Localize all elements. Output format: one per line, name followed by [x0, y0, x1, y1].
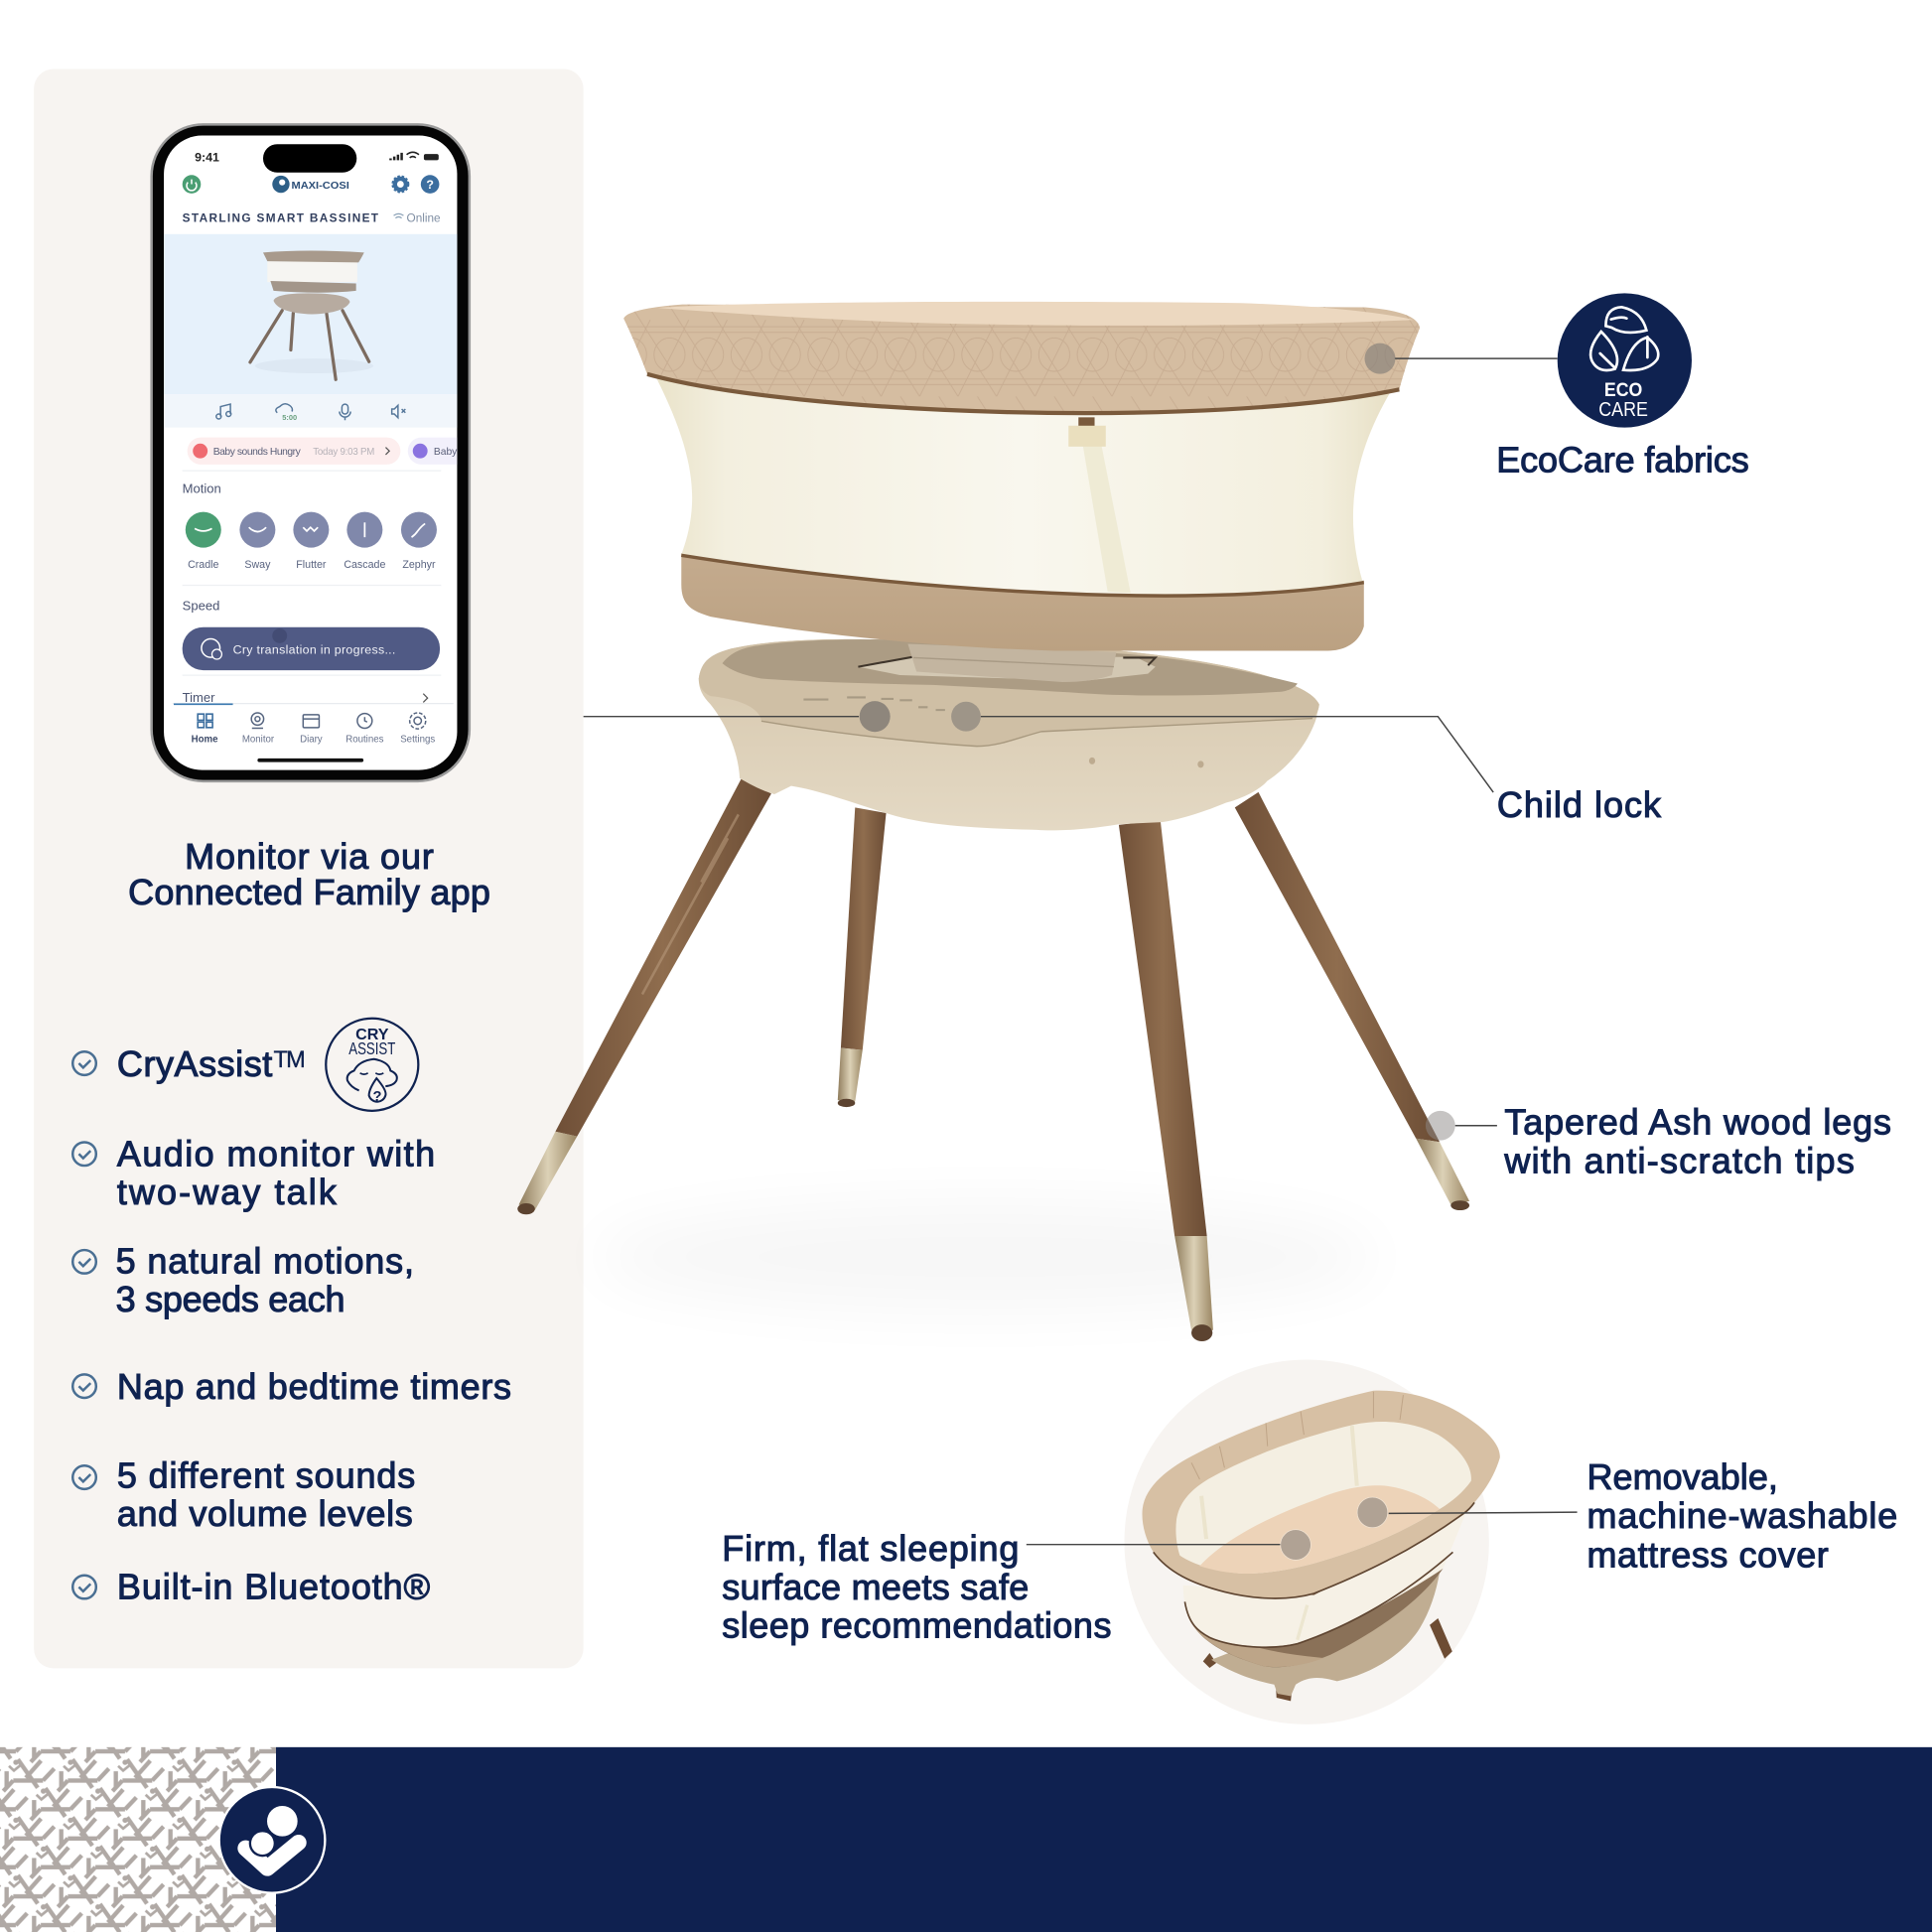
leader: sleeping surface — [1027, 1544, 1280, 1546]
timer row — [183, 693, 429, 703]
inset legs — [1203, 1618, 1452, 1701]
status bar: 9:41 — [195, 151, 219, 165]
status bar — [195, 144, 439, 173]
inset mattress — [1199, 1485, 1440, 1574]
feature: motions: 5 natural motions, — [116, 1241, 414, 1282]
footer banner — [0, 1747, 1932, 1932]
motion controls: Motion — [183, 481, 221, 495]
tab bar: Monitor — [242, 735, 275, 746]
icon: cry assist badge: ASSIST — [348, 1038, 396, 1058]
callout: sleeping surface: sleep recommendations — [722, 1604, 1111, 1645]
tab bar: Routines — [345, 735, 384, 746]
top rim — [621, 299, 1428, 421]
tab bar: Home — [192, 735, 218, 746]
callout: mattress cover: mattress cover — [1587, 1535, 1829, 1576]
product hero area — [164, 234, 457, 428]
callout: legs: with anti-scratch tips — [1503, 1140, 1855, 1180]
app header: STARLING SMART BASSINET — [183, 211, 379, 224]
feature: CryAssist — [72, 1043, 306, 1084]
base body — [699, 639, 1319, 830]
feature: CryAssist: TM — [274, 1046, 306, 1072]
feature: motions — [72, 1241, 414, 1319]
alert pills: Baby — [434, 447, 458, 458]
motion controls: Cascade — [344, 559, 385, 571]
motion controls: Flutter — [296, 559, 327, 571]
back legs — [838, 792, 1469, 1210]
floor shadow — [592, 1201, 1380, 1312]
speed label: Speed — [183, 598, 219, 613]
phone mockup — [150, 123, 471, 782]
feature: motions: 3 speeds each — [116, 1279, 345, 1319]
icon: eco care badge: ECO — [1604, 379, 1642, 401]
leader: mattress cover — [1389, 1512, 1578, 1513]
icon: cry assist badge — [326, 1019, 418, 1111]
inset: bassinet top view — [1124, 1360, 1500, 1725]
icon: eco care badge: CARE — [1598, 398, 1648, 421]
timer row: Timer — [183, 690, 215, 705]
alert pills: Today 9:03 PM — [313, 447, 374, 458]
motion controls: Sway — [244, 559, 271, 571]
icon: eco care badge — [1558, 293, 1692, 428]
inset interior — [1175, 1422, 1471, 1574]
icon: cry assist badge: CRY — [355, 1026, 389, 1043]
feature: timers: Nap and bedtime timers — [117, 1366, 511, 1407]
heading: connected family app: Monitor via our — [185, 836, 434, 877]
callout: mattress cover: Removable, — [1587, 1456, 1778, 1497]
motion controls: Zephyr — [402, 559, 436, 571]
marker: legs — [1426, 1111, 1497, 1141]
feature: sounds: 5 different sounds — [117, 1455, 415, 1496]
callout: sleeping surface: Firm, flat sleeping — [722, 1528, 1019, 1569]
feature: audio monitor — [72, 1134, 435, 1212]
front legs — [517, 778, 1213, 1341]
tab bar — [173, 704, 454, 762]
tab bar: Settings — [400, 735, 435, 746]
callout: sleeping surface — [722, 1528, 1111, 1645]
mesh wall — [651, 368, 1396, 595]
callout: mattress cover: machine-washable — [1587, 1495, 1897, 1536]
inset markers — [1281, 1530, 1311, 1560]
app header: MAXI-COSI — [292, 181, 349, 192]
panel: app and features — [34, 69, 584, 1668]
main bassinet — [517, 299, 1469, 1341]
feature: CryAssist: CryAssist — [117, 1043, 272, 1084]
feature: bluetooth: Built-in Bluetooth® — [117, 1566, 430, 1606]
callout: ecocare fabrics: EcoCare fabrics — [1496, 439, 1749, 480]
toast: cry translation — [183, 627, 440, 670]
timer label: 5:00 — [282, 413, 297, 422]
lower fabric band — [681, 553, 1364, 650]
heading: connected family app: Connected Family app — [128, 872, 490, 912]
callout: child lock: Child lock — [1497, 784, 1662, 825]
icon: cry assist badge: ? — [372, 1089, 381, 1105]
icon: brand logo — [219, 1787, 325, 1893]
alert pills: Baby sounds Hungry — [213, 447, 302, 458]
mesh strap and tag — [1068, 417, 1131, 593]
app header — [183, 175, 441, 224]
callout: legs — [1503, 1101, 1891, 1180]
feature: sounds — [72, 1455, 415, 1534]
alert pills — [188, 438, 470, 465]
inset rim — [1142, 1391, 1500, 1598]
marker: ecocare fabric — [1364, 344, 1558, 374]
marker: child lock — [584, 701, 1493, 792]
inset lower band — [1185, 1569, 1443, 1667]
feature: audio monitor: two-way talk — [117, 1172, 338, 1212]
feature: audio monitor: Audio monitor with — [117, 1134, 435, 1174]
callout: mattress cover — [1587, 1456, 1897, 1576]
app header: ? — [426, 178, 434, 192]
quick controls — [216, 404, 405, 420]
callout: sleeping surface: surface meets safe — [722, 1567, 1029, 1607]
motion controls: Cradle — [188, 559, 219, 571]
tab bar: Diary — [300, 735, 323, 746]
callout: legs: Tapered Ash wood legs — [1504, 1101, 1891, 1142]
feature: sounds: and volume levels — [117, 1493, 413, 1534]
app header: Online — [407, 211, 441, 224]
toast: cry translation: Cry translation in progress... — [233, 642, 395, 656]
heading: connected family app — [128, 836, 490, 912]
inset mesh — [1183, 1512, 1466, 1647]
inset base — [1211, 1572, 1440, 1696]
motion controls — [183, 481, 437, 571]
